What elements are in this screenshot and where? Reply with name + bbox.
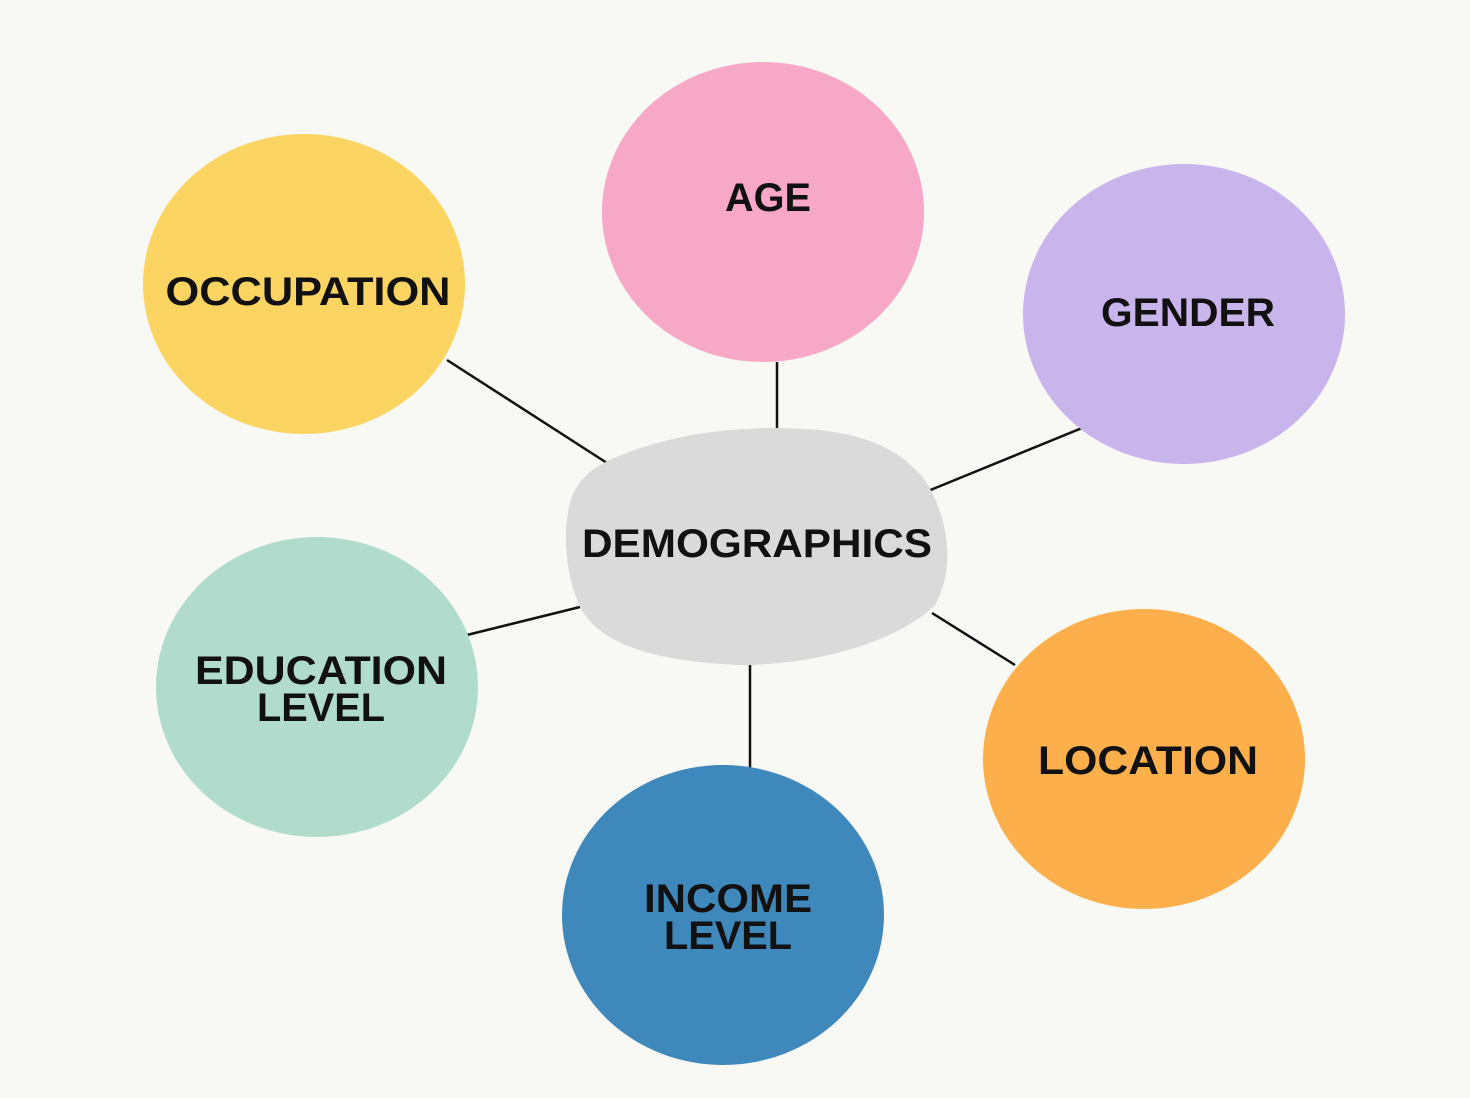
node: occupation: OCCUPATION <box>166 270 450 314</box>
node: income level: INCOME <box>644 877 812 921</box>
node: age <box>602 62 924 362</box>
node: income level: LEVEL <box>664 914 792 958</box>
node: education level: LEVEL <box>257 686 385 730</box>
center: demographics <box>566 428 947 665</box>
node: location <box>983 609 1305 909</box>
node: age: AGE <box>725 176 811 220</box>
node: education level: EDUCATION <box>195 649 447 693</box>
node: location: LOCATION <box>1038 739 1258 783</box>
node: gender <box>1023 164 1345 464</box>
center: demographics: DEMOGRAPHICS <box>582 522 932 566</box>
node: income level <box>562 765 884 1065</box>
connector lines <box>447 360 1082 768</box>
node: education level <box>156 537 478 837</box>
node: occupation <box>143 134 465 434</box>
node: gender: GENDER <box>1101 291 1275 335</box>
